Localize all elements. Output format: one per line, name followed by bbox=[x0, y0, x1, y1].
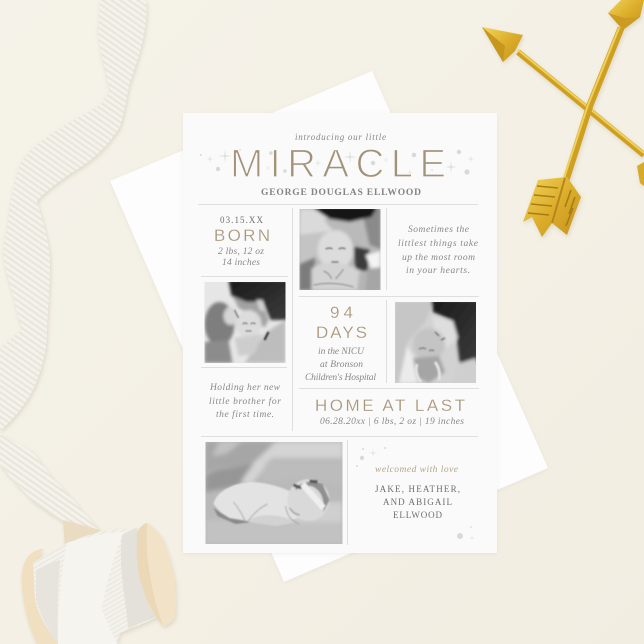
arrow two bbox=[523, 0, 644, 237]
quote: littlest things: in your hearts. bbox=[406, 266, 470, 276]
wrap front strap bbox=[58, 532, 123, 644]
quote: holding her brother bbox=[209, 383, 281, 420]
photo: sister kissing baby bbox=[204, 280, 288, 363]
days: DAYS bbox=[316, 323, 367, 342]
ribbon bbox=[0, 0, 147, 530]
panel: 94 days: at Bronson bbox=[320, 360, 363, 370]
home details: 06.28.20xx | 6 lbs, 2 oz | 19 inches bbox=[320, 417, 464, 427]
panel: 94 days bbox=[305, 303, 376, 383]
wrap shading bbox=[121, 528, 156, 628]
panel: 94 days: Children's Hospital bbox=[305, 373, 376, 383]
NICU details: in the NICU bbox=[318, 347, 365, 357]
decorative stars bottom bbox=[356, 447, 475, 541]
birth date: 03.15.XX bbox=[220, 215, 264, 225]
panel: born bbox=[214, 215, 270, 268]
spool left disc bbox=[22, 549, 58, 644]
home heading: HOME AT LAST bbox=[315, 396, 465, 415]
decorative stars top bbox=[200, 149, 475, 177]
born heading: BORN bbox=[214, 226, 270, 245]
94: 94 bbox=[330, 303, 353, 322]
back card bbox=[110, 71, 548, 582]
quote: holding her brother: little brother for bbox=[209, 396, 281, 407]
quote: littlest things bbox=[398, 225, 478, 276]
quote: littlest things: littlest things take bbox=[398, 239, 478, 249]
ribbon back fold bbox=[63, 520, 100, 548]
photo: parent holding baby bbox=[300, 207, 380, 291]
quote: holding her brother: the first time. bbox=[216, 409, 274, 420]
spool right disc bbox=[137, 523, 176, 626]
panel: welcomed with love bbox=[375, 465, 460, 520]
baby name: GEORGE DOUGLAS ELLWOOD bbox=[261, 188, 421, 198]
quote: littlest things: Sometimes the bbox=[408, 225, 469, 235]
panel: welcomed with love: AND ABIGAIL bbox=[383, 497, 452, 507]
photo: sleeping newborn bbox=[206, 442, 342, 544]
title MIRACLE: MIRACLE bbox=[230, 142, 446, 186]
announcement card bbox=[183, 113, 497, 553]
birth weight: 2 lbs, 12 oz bbox=[218, 247, 264, 257]
spool wrap bbox=[33, 528, 157, 644]
photo: mother with baby bbox=[395, 300, 479, 384]
birth length: 14 inches bbox=[222, 258, 260, 268]
panel: welcomed with love: ELLWOOD bbox=[393, 510, 442, 520]
golden crossed arrows bbox=[482, 0, 644, 237]
spool of ribbon bbox=[22, 520, 176, 644]
grid divider lines bbox=[198, 204, 479, 545]
quote: holding her brother: Holding her new bbox=[209, 383, 281, 393]
heading intro: introducing our little bbox=[295, 132, 386, 142]
welcome line: welcomed with love bbox=[375, 465, 458, 475]
arrow one bbox=[482, 27, 644, 186]
card panel bbox=[183, 113, 497, 553]
panel: home at last bbox=[315, 396, 465, 427]
family names: JAKE, HEATHER, bbox=[375, 484, 460, 494]
quote: littlest things: up the most room bbox=[402, 253, 475, 263]
